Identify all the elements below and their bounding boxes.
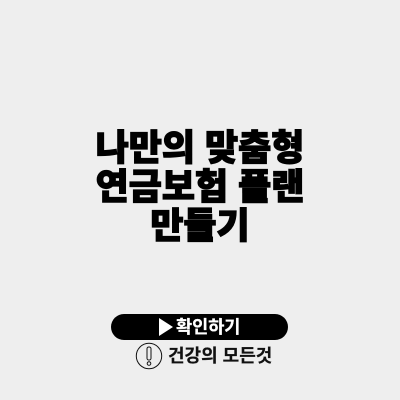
title [96,127,304,246]
icon: play triangle [159,318,173,336]
title: 만들기 [150,205,250,246]
button: confirm [111,314,288,340]
icon: exclamation circle [136,342,162,370]
button label: 확인하기 [176,317,240,337]
caption: 건강의 모든것 [168,346,272,366]
title: 나만의 맞춤형 [96,127,304,168]
title: 연금보험 플랜 [96,166,304,207]
